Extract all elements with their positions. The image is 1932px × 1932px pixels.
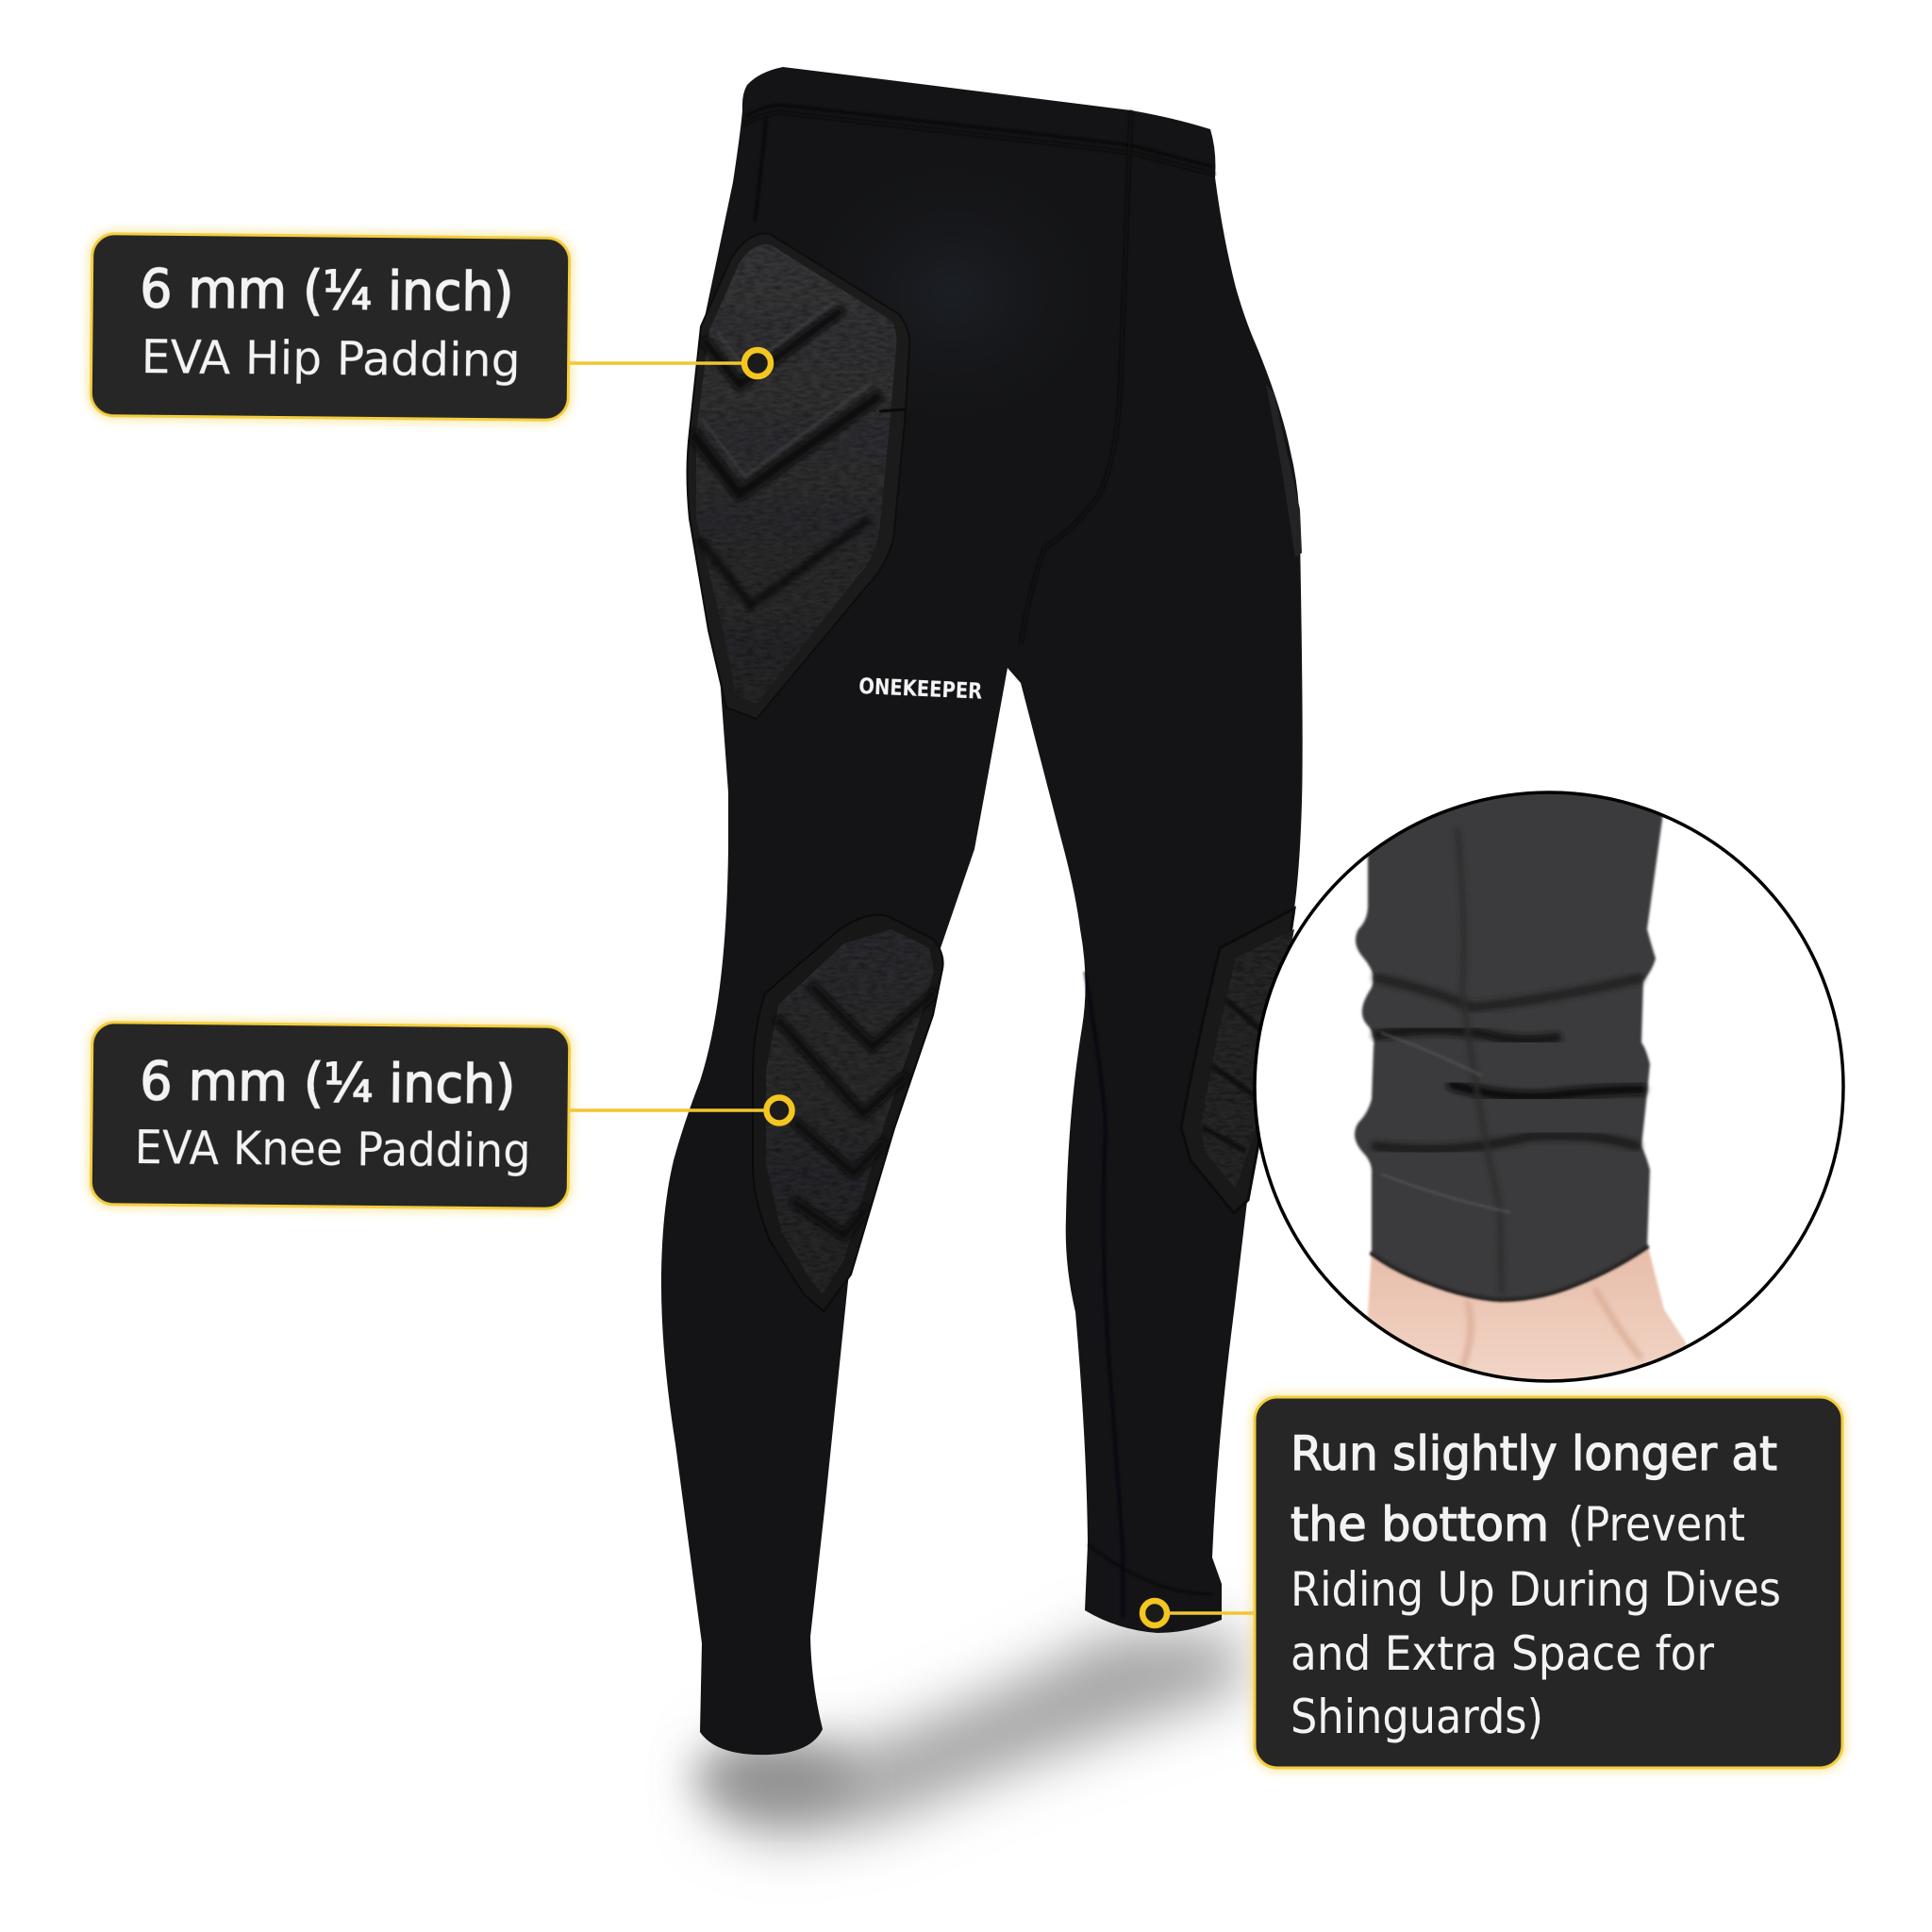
hip subheading: EVA Hip Padding <box>141 330 521 388</box>
cuff text: the bottom <box>1291 1497 1549 1552</box>
skin <box>1366 1243 1688 1379</box>
inset circle border <box>1255 792 1843 1381</box>
pad groove shading <box>691 309 881 606</box>
leader line: knee <box>570 1098 792 1123</box>
trousers <box>661 67 1303 1755</box>
cuff text: (Prevent <box>1568 1497 1745 1552</box>
knee heading: 6 mm (¼ inch) <box>140 1051 516 1116</box>
cuff text: and Extra Space for <box>1291 1626 1714 1681</box>
inset circle fill <box>1255 792 1843 1381</box>
knee pad <box>753 915 943 1311</box>
hip pad <box>687 234 909 719</box>
cuff shading <box>1372 830 1647 1300</box>
cuff text: Riding Up During Dives <box>1291 1562 1781 1617</box>
cuff text: Run slightly longer at <box>1291 1426 1777 1481</box>
cuff text: Shinguards) <box>1291 1690 1543 1744</box>
knee subheading: EVA Knee Padding <box>134 1121 531 1178</box>
marker: knee <box>766 1098 792 1123</box>
cuff text <box>1291 1426 1781 1744</box>
brand logo: ONEKEEPER <box>858 675 983 705</box>
floor shadow <box>693 1632 1245 1840</box>
upper sheen <box>769 132 1137 453</box>
rear knee pad <box>1181 908 1294 1213</box>
inset: cuff close-up <box>1255 774 1843 1396</box>
cuff fabric <box>1355 774 1664 1300</box>
marker: hip <box>744 350 771 376</box>
callout: longer cuff <box>1255 1397 1842 1768</box>
callout: knee padding <box>91 1023 570 1208</box>
right hip pad sliver <box>1266 384 1302 558</box>
hip heading: 6 mm (¼ inch) <box>140 258 514 324</box>
marker: cuff <box>1142 1601 1167 1625</box>
waistband seams <box>744 105 1215 1618</box>
callout: hip padding <box>91 234 570 420</box>
leader line: cuff <box>1142 1601 1255 1625</box>
trousers silhouette <box>661 67 1303 1755</box>
leader line: hip <box>570 350 771 376</box>
